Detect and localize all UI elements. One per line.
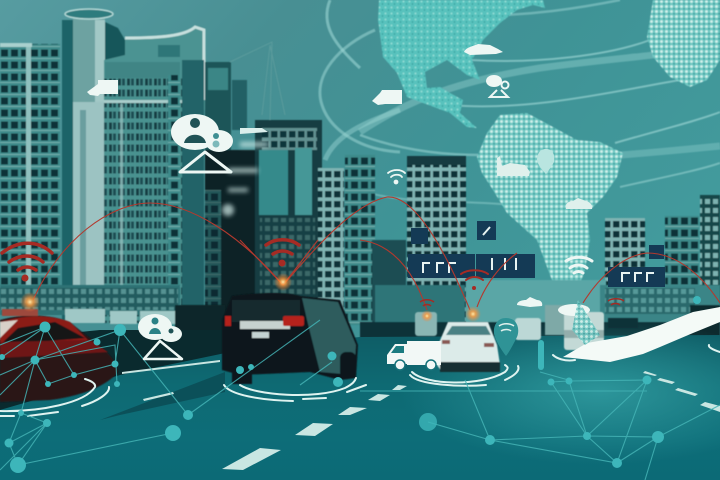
icon: car, on map <box>464 44 503 55</box>
road <box>0 335 720 480</box>
ring: black van <box>240 378 356 395</box>
continent: North America <box>378 0 545 128</box>
icon: truck, white on building <box>87 80 118 96</box>
building: central right tower <box>407 156 466 327</box>
icon: person pin, South America <box>537 149 554 174</box>
vertical light streak on road <box>538 340 544 370</box>
signal lamps <box>20 273 481 322</box>
road: dark shadow wedge <box>100 372 225 420</box>
icon: wifi, white on map tip <box>566 257 592 273</box>
icon: location pin with wifi <box>494 318 518 356</box>
building: low block by the road <box>372 240 406 325</box>
network lines <box>0 320 720 480</box>
ring: white car <box>412 365 508 383</box>
building: dark mid-rise <box>205 62 320 320</box>
wifi: red by white car <box>461 270 488 290</box>
sign: lane arrows right <box>476 254 535 278</box>
vehicle: red car <box>0 309 118 402</box>
red signal arcs <box>33 197 720 310</box>
icon: cloud, above traffic <box>517 297 542 307</box>
building: main apartment block <box>104 25 207 323</box>
midground traffic and fence band <box>0 280 720 350</box>
building: far left block <box>0 43 60 314</box>
glow: lights between towers <box>222 142 268 216</box>
building: tall tower <box>62 9 125 322</box>
wifi: red left <box>2 243 52 282</box>
icon: people cloud, small <box>138 314 182 359</box>
icon: truck, white on map <box>372 90 402 105</box>
far traffic <box>415 305 638 340</box>
road: bright sheen on the right <box>400 320 720 464</box>
sign: lane arrows left <box>408 254 475 278</box>
icon: people cloud, large <box>171 114 268 172</box>
network nodes <box>0 296 701 473</box>
proximity rings around cars <box>0 345 720 416</box>
icon: white delivery truck <box>387 341 441 370</box>
icon: cloud, South America <box>566 198 592 209</box>
wifi: red centre <box>266 240 299 266</box>
skyline buildings <box>0 9 720 328</box>
white glow on map tip <box>558 304 590 316</box>
sign: small left panel <box>411 228 428 244</box>
continent: Africa <box>647 0 720 87</box>
overhead signs <box>408 221 665 287</box>
sign: small arrow panel <box>477 221 496 240</box>
vehicle: black van <box>222 293 358 384</box>
sign: small far right panel <box>649 245 664 259</box>
building: teal tower <box>345 155 375 325</box>
crane <box>230 42 285 120</box>
vehicle: white car <box>437 322 500 372</box>
ring: van far right <box>553 345 720 361</box>
road markings <box>122 360 720 470</box>
building: right towers <box>605 195 720 313</box>
vehicle: white van far right <box>564 312 604 350</box>
ring: red car <box>0 379 95 411</box>
building: construction block with glass panels <box>255 120 322 320</box>
orbit rings across the sky <box>320 0 720 205</box>
icon: wifi, white on skyline <box>388 170 405 184</box>
icon: person pin, on map <box>487 76 508 97</box>
wifi: small red far <box>420 299 624 306</box>
icon: factory cloud, on map <box>497 156 530 176</box>
speckled trail <box>572 300 600 345</box>
continent: South America <box>477 113 623 303</box>
sign: lane arrows far right <box>608 267 665 287</box>
road: dark shadow beneath the left traffic <box>0 330 230 410</box>
white data splash <box>563 307 720 362</box>
building: narrow white tower <box>318 168 344 328</box>
